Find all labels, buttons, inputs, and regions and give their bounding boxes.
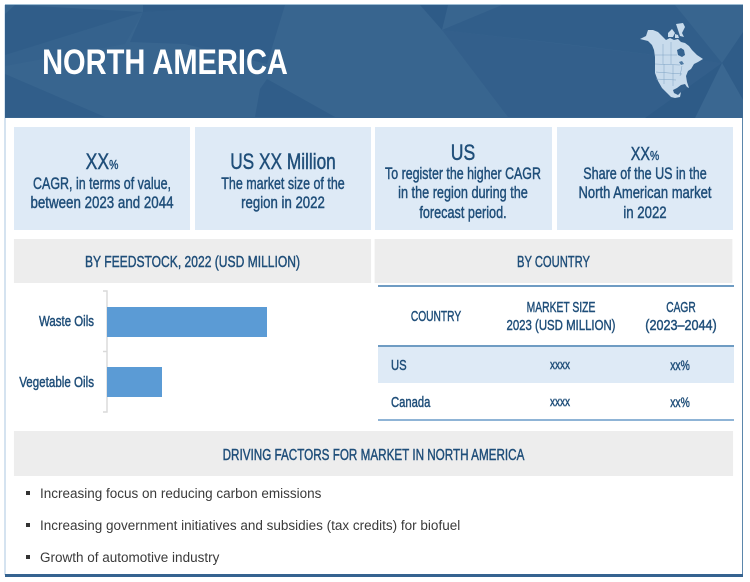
stat description: between 2023 and 2044 <box>30 194 174 212</box>
stat value: US XX Million <box>230 149 336 174</box>
stat card: market size <box>195 127 371 230</box>
column header: market size: 2023 (USD MILLION) <box>507 317 615 334</box>
stat description: region in 2022 <box>241 194 325 212</box>
cell: country: US <box>391 357 407 374</box>
stat description: North American market <box>579 184 711 202</box>
top rule <box>378 285 734 287</box>
left frame line <box>4 5 6 575</box>
heading: by country: BY COUNTRY <box>517 254 590 271</box>
stat value: US <box>451 140 475 165</box>
column header: CAGR: (2023–2044) <box>645 317 717 334</box>
row: US <box>378 345 734 383</box>
column header: CAGR <box>645 299 717 334</box>
icon: North America map <box>640 23 703 98</box>
stat description: in the region during the <box>398 184 528 202</box>
column header: country: COUNTRY <box>411 308 461 325</box>
column header: CAGR: CAGR <box>666 299 696 316</box>
stat card: US share <box>557 127 733 230</box>
stat description: forecast period. <box>419 204 507 222</box>
cell: size: xxxx <box>550 394 570 409</box>
stat value: XX% <box>86 149 118 174</box>
stat description <box>385 165 541 222</box>
heading: by country <box>375 239 732 283</box>
bullet list: driving factors <box>26 486 460 565</box>
column header: market size: MARKET SIZE <box>527 299 595 316</box>
bottom frame line <box>5 574 743 577</box>
row: Canada <box>378 383 734 421</box>
stat description <box>579 165 712 222</box>
heading: driving factors <box>14 431 733 476</box>
label: vegetable oils: Vegetable Oils <box>19 375 94 391</box>
cell: country: Canada <box>391 394 430 411</box>
cell: CAGR: xx% <box>670 357 690 373</box>
column header: market size <box>506 299 615 334</box>
label: waste oils: Waste Oils <box>39 314 94 330</box>
stat card: CAGR <box>14 127 190 230</box>
factor 2: Increasing government initiatives and subsidies (tax credits) for biofuel <box>40 518 460 533</box>
factor 3: Growth of automotive industry <box>40 550 219 565</box>
header banner <box>5 4 743 118</box>
bar chart <box>19 290 267 413</box>
heading: driving factors: DRIVING FACTORS FOR MARKET IN NORTH AMERICA <box>223 447 524 464</box>
stat description <box>221 174 345 212</box>
heading: by feedstock <box>14 239 371 283</box>
title: NORTH AMERICA <box>42 43 288 82</box>
stat value: XX% <box>631 144 659 164</box>
stat card: US CAGR <box>375 127 552 230</box>
banner background facets <box>5 4 743 118</box>
bullet marker <box>26 523 30 527</box>
bar: waste oils <box>107 307 267 337</box>
stat description: The market size of the <box>221 174 345 192</box>
stat description: CAGR, in terms of value, <box>33 174 171 192</box>
cell: size: xxxx <box>550 357 570 372</box>
axis <box>103 290 108 413</box>
stat description <box>30 174 174 212</box>
stat description: in 2022 <box>623 204 667 222</box>
cell: CAGR: xx% <box>670 394 690 410</box>
bar: vegetable oils <box>107 367 162 397</box>
stat description: Share of the US in the <box>583 165 707 183</box>
right frame line <box>742 5 743 576</box>
heading: by feedstock: BY FEEDSTOCK, 2022 (USD MILLION) <box>85 254 300 271</box>
bullet marker <box>26 491 30 495</box>
stat description: To register the higher CAGR <box>385 165 541 183</box>
factor 1: Increasing focus on reducing carbon emissions <box>40 486 321 501</box>
bullet marker <box>26 555 30 559</box>
country table <box>378 285 734 421</box>
